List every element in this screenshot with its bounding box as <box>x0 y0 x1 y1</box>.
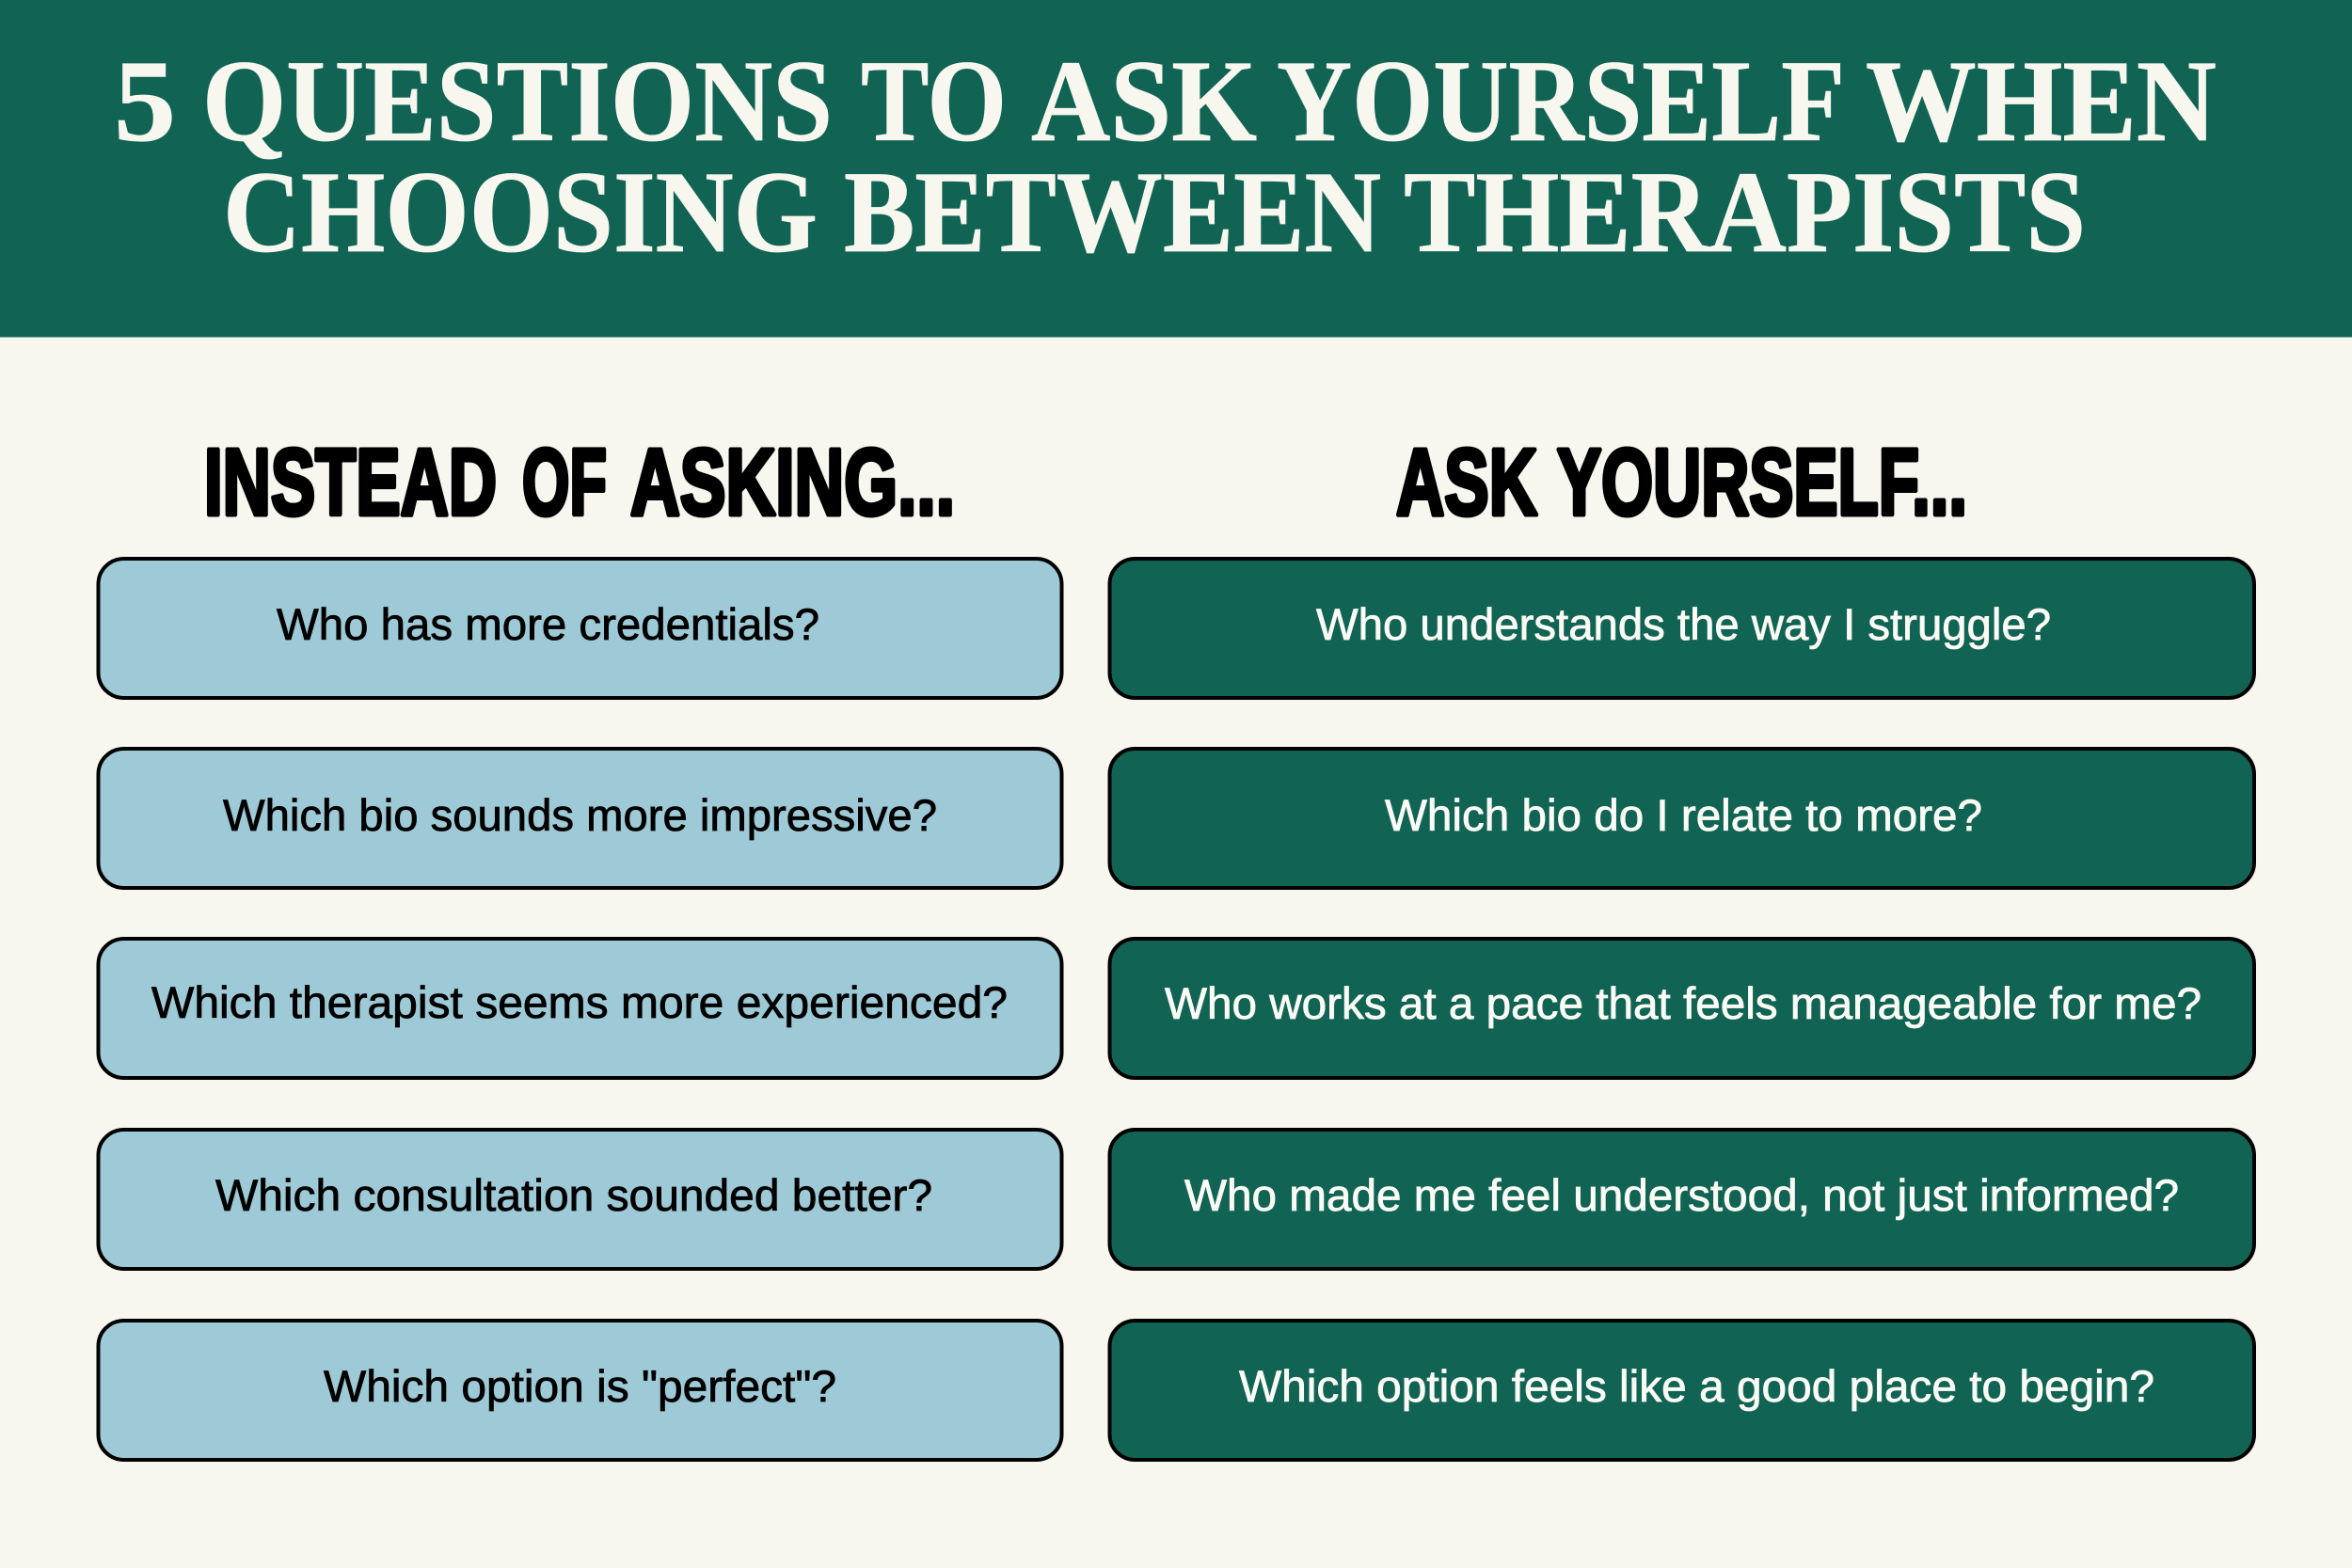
card: manageable pace: Who works at a pace that feels manageable for me? <box>1165 978 2201 1028</box>
card: bio impressive <box>98 749 1061 888</box>
title: BETWEEN <box>844 148 1381 277</box>
title: QUESTIONS <box>202 37 833 166</box>
card: experienced <box>98 939 1061 1078</box>
card: consultation <box>98 1130 1061 1269</box>
title: YOURSELF <box>1277 37 1845 166</box>
card: consultation: Which consultation sounded better? <box>215 1170 932 1220</box>
title: 5 <box>114 37 176 166</box>
heading: instead of asking <box>204 430 955 535</box>
heading: instead of asking: INSTEAD <box>204 430 497 535</box>
card: credentials <box>98 559 1061 698</box>
title: CHOOSING <box>223 148 818 277</box>
card: good place to begin: Which option feels like a good place to begin? <box>1239 1361 2154 1411</box>
panel: instead of asking column <box>98 430 1061 1460</box>
card: felt understood <box>1110 1130 2254 1269</box>
card: perfect: Which option is "perfect"? <box>324 1361 836 1411</box>
panel: ask yourself column <box>1110 430 2254 1460</box>
card: relate to bio <box>1110 749 2254 888</box>
heading: instead of asking: ASKING... <box>630 430 955 535</box>
heading: ask yourself <box>1396 430 1967 535</box>
heading: ask yourself: ASK <box>1396 430 1537 535</box>
card: perfect <box>98 1321 1061 1460</box>
card: experienced: Which therapist seems more experienced? <box>151 977 1008 1027</box>
card: relate to bio: Which bio do I relate to more? <box>1385 790 1982 840</box>
title: ASK <box>1031 37 1257 166</box>
card: understands struggle <box>1110 559 2254 698</box>
title: WHEN <box>1866 37 2217 166</box>
title <box>114 37 2217 277</box>
heading: ask yourself: YOURSELF... <box>1557 430 1967 535</box>
heading: instead of asking: OF <box>522 430 607 535</box>
title: THERAPISTS <box>1404 148 2086 277</box>
card: credentials: Who has more credentials? <box>277 599 819 649</box>
card: understands struggle: Who understands the way I struggle? <box>1316 599 2051 649</box>
card: felt understood: Who made me feel understood, not just informed? <box>1184 1170 2179 1220</box>
title: TO <box>861 37 1007 166</box>
card: manageable pace <box>1110 939 2254 1078</box>
card: bio impressive: Which bio sounds more impressive? <box>223 790 937 840</box>
card: good place to begin <box>1110 1321 2254 1460</box>
header banner <box>0 0 2352 337</box>
